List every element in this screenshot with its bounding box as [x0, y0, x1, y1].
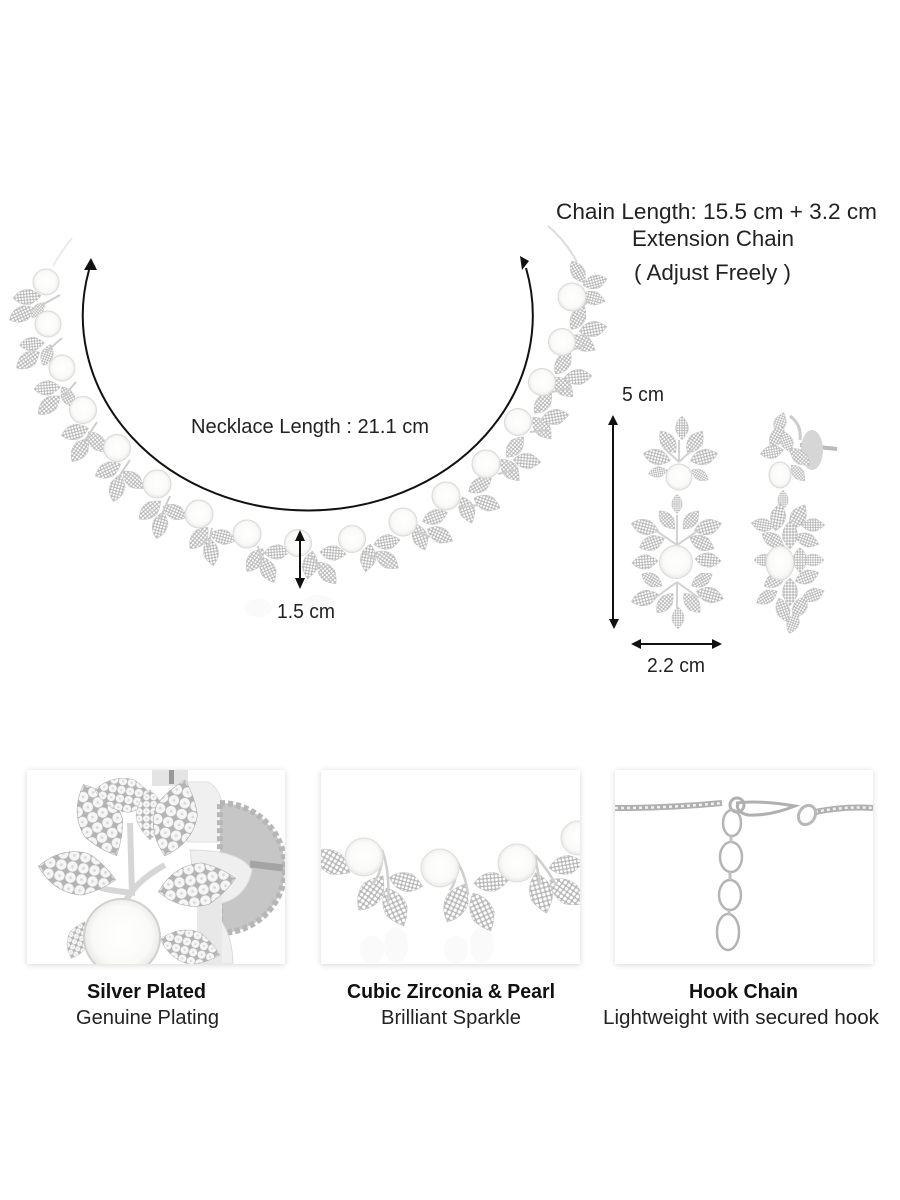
- right strand pearls: [338, 283, 586, 552]
- caption: hook chain: Lightweight with secured hook: [603, 1007, 880, 1029]
- close-up of clasp and chain: [615, 798, 873, 950]
- earring back and post: [790, 416, 837, 470]
- caption: silver plated: [76, 981, 219, 1029]
- chain length note: ( Adjust Freely ): [634, 260, 791, 285]
- left strand leaves: [6, 288, 291, 586]
- upper flower: [642, 416, 719, 490]
- side pearls: [766, 462, 794, 580]
- caption: cubic zirconia and pearl: Brilliant Sparkle: [381, 1007, 521, 1029]
- panel: hook chain: [615, 770, 873, 964]
- connector leaf: [672, 494, 682, 514]
- necklace length label: Necklace Length : 21.1 cm: [191, 416, 429, 438]
- caption: silver plated: Genuine Plating: [76, 1007, 219, 1029]
- earring width arrow: [631, 639, 722, 649]
- pendant height label: 1.5 cm: [277, 601, 335, 623]
- photo frame: [321, 770, 580, 964]
- lower flower: [630, 507, 725, 629]
- left strand pearls: [33, 269, 312, 556]
- earring height label: 5 cm: [622, 384, 664, 406]
- close-up of necklace: [321, 820, 580, 932]
- caption: cubic zirconia and pearl: Cubic Zirconia & Pearl: [347, 981, 555, 1003]
- earring width label: 2.2 cm: [647, 655, 705, 677]
- panel: silver plated: [27, 770, 285, 975]
- necklace: [6, 226, 609, 589]
- chain length note: [556, 199, 877, 285]
- side leaves: [750, 410, 826, 636]
- pendant height arrow: [295, 530, 305, 589]
- photo frame: [27, 770, 285, 964]
- stems: [42, 295, 590, 568]
- chain length note: Extension Chain: [632, 226, 794, 251]
- earring side view: [750, 410, 837, 636]
- close-up of earring: [35, 770, 285, 975]
- necklace length arc arrow: [83, 256, 533, 511]
- earring front view: [630, 416, 725, 629]
- earring height arrow: [608, 415, 619, 629]
- panel: cubic zirconia and pearl: [308, 770, 595, 964]
- caption: silver plated: Silver Plated: [87, 981, 206, 1003]
- caption: hook chain: Hook Chain: [689, 981, 798, 1003]
- chain length note: Chain Length: 15.5 cm + 3.2 cm: [556, 199, 877, 224]
- right strand leaves: [300, 258, 609, 589]
- caption: hook chain: [603, 981, 880, 1029]
- necklace reflection: [244, 595, 334, 617]
- chain ends: [53, 226, 577, 266]
- photo frame: [615, 770, 873, 964]
- caption: cubic zirconia and pearl: [347, 981, 555, 1029]
